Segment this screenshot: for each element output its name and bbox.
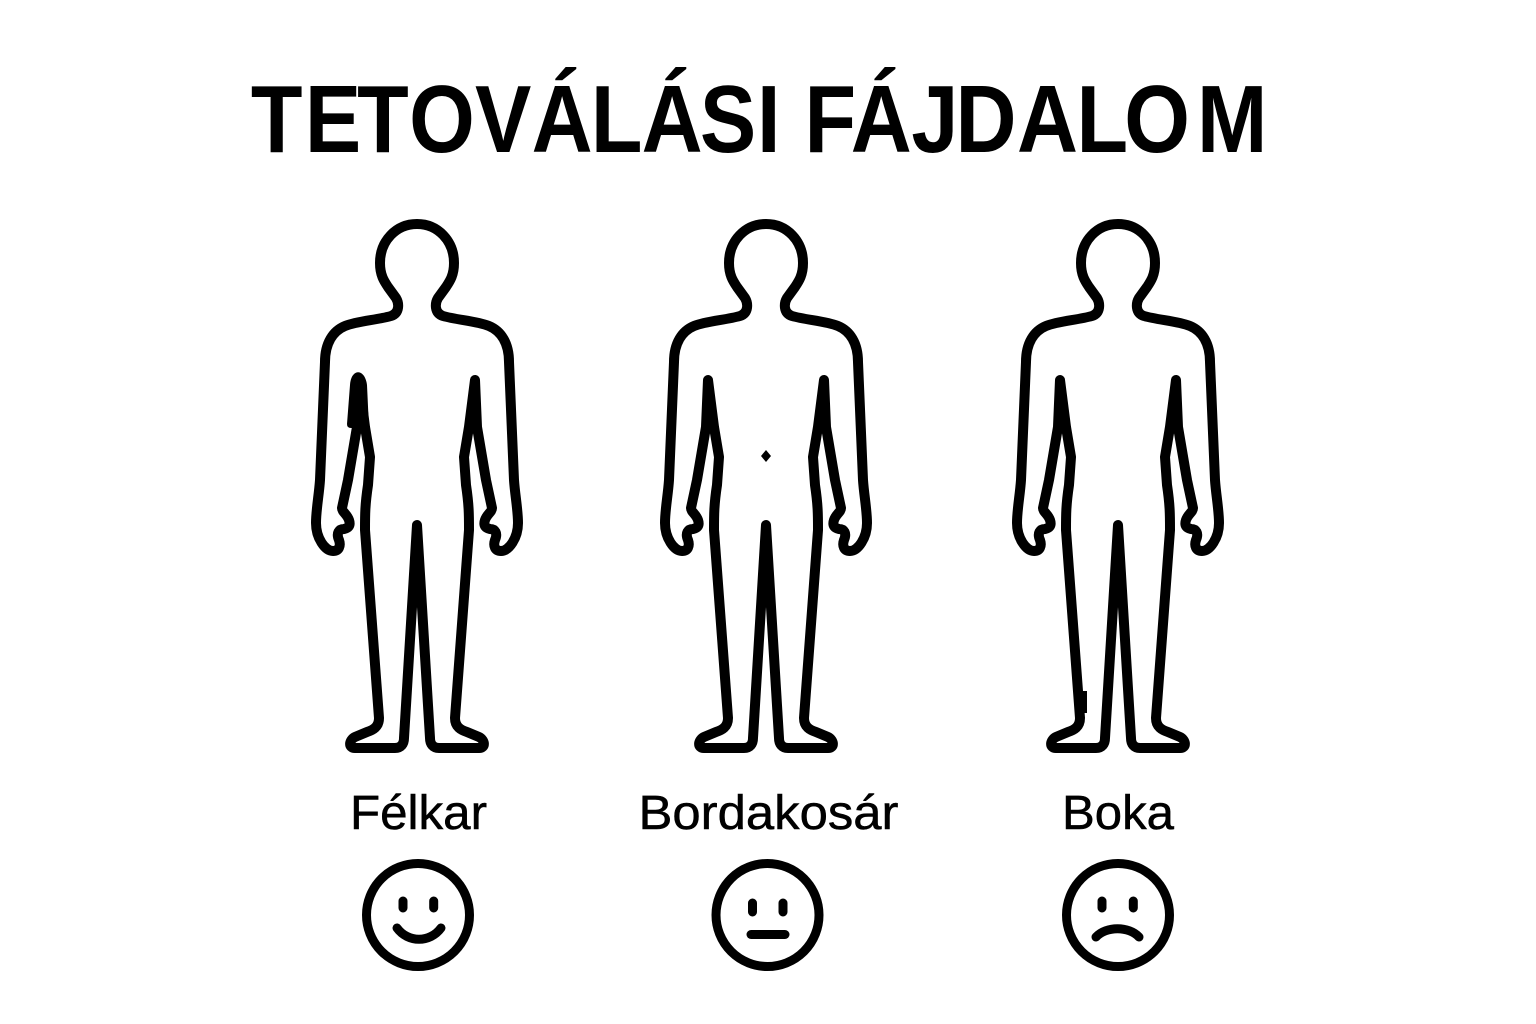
highlighted area: ribcage mark — [761, 450, 771, 462]
label: Boka: Boka — [1062, 787, 1174, 840]
highlighted area: ankle — [1079, 691, 1087, 713]
body outline — [316, 224, 518, 748]
body outline — [1017, 224, 1219, 748]
label: Félkar: Félkar — [350, 787, 487, 840]
icon: smiling face — [366, 864, 470, 966]
figure: upper arm (Félkar) — [316, 224, 518, 748]
body outline — [665, 224, 867, 748]
highlighted area: upper arm — [347, 372, 369, 428]
figure: ribcage (Bordakosár) — [665, 224, 867, 748]
icon: neutral face — [716, 864, 819, 966]
label: Bordakosár: Bordakosár — [638, 787, 899, 840]
title: TETOVÁLÁSI FÁJDALOM — [251, 66, 1267, 173]
figure: ankle (Boka) — [1017, 224, 1219, 748]
icon: sad face — [1066, 864, 1170, 966]
